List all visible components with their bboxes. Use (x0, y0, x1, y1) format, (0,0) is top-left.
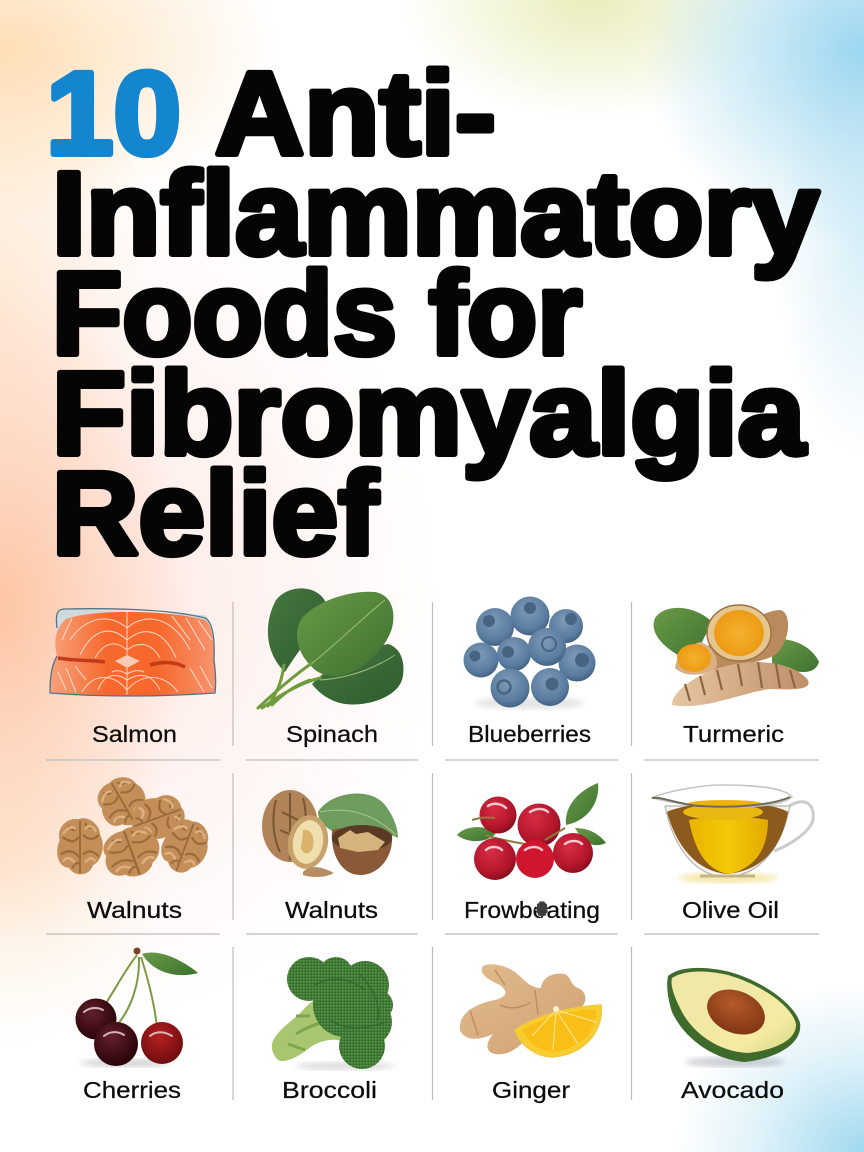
food card: blueberries (464, 596, 596, 747)
label: Ginger: Ginger (492, 1077, 570, 1103)
icon: walnut shells and leaf (262, 790, 398, 877)
title line: Foods for: Foods for (52, 248, 582, 380)
food card: walnuts and leaf (262, 790, 398, 923)
label: Spinach: Spinach (286, 721, 378, 747)
title line: Relief: Relief (52, 448, 379, 580)
food card: salmon (50, 609, 216, 747)
icon: spinach leaves (258, 588, 403, 708)
icon: walnut halves (57, 770, 215, 885)
label: Salmon: Salmon (92, 721, 177, 747)
icon: dark cherries with leaf (76, 948, 198, 1067)
food card: avocado (667, 968, 800, 1103)
food card: cranberries, garbled label (457, 783, 606, 923)
title line: Fibromyalgia: Fibromyalgia (52, 348, 806, 480)
icon: red berries with leaves (457, 783, 606, 880)
icon: smudge inside label (536, 901, 548, 917)
label: Frowbeating: Frowbeating (464, 897, 600, 923)
title (46, 48, 819, 580)
food card: spinach (258, 588, 403, 747)
food card: walnuts (57, 770, 215, 923)
icon: broccoli head (272, 957, 395, 1070)
title number: 10: 10 (46, 48, 181, 180)
food card: olive oil (652, 785, 813, 923)
label: Turmeric: Turmeric (683, 721, 784, 747)
label: Walnuts: Walnuts (87, 897, 182, 923)
label: Avocado: Avocado (681, 1077, 784, 1103)
food card: ginger (460, 964, 601, 1103)
label: Blueberries: Blueberries (468, 721, 591, 747)
label: Cherries: Cherries (83, 1077, 181, 1103)
icon: avocado half (667, 968, 800, 1067)
label: Olive Oil: Olive Oil (682, 897, 779, 923)
icon: turmeric root (654, 605, 819, 706)
icon: ginger and lemon wedge (460, 964, 601, 1057)
food card: cherries (76, 948, 198, 1103)
food card: turmeric (654, 605, 819, 747)
food card: broccoli (272, 957, 395, 1103)
icon: glass jug of olive oil (652, 785, 813, 883)
icon: salmon fillet (50, 609, 216, 696)
label: Walnuts: Walnuts (285, 897, 378, 923)
title line: Anti-: Anti- (215, 48, 496, 180)
icon: blueberries (464, 596, 596, 709)
title line: Inflammatory: Inflammatory (52, 148, 819, 280)
label: Broccoli: Broccoli (282, 1077, 377, 1103)
